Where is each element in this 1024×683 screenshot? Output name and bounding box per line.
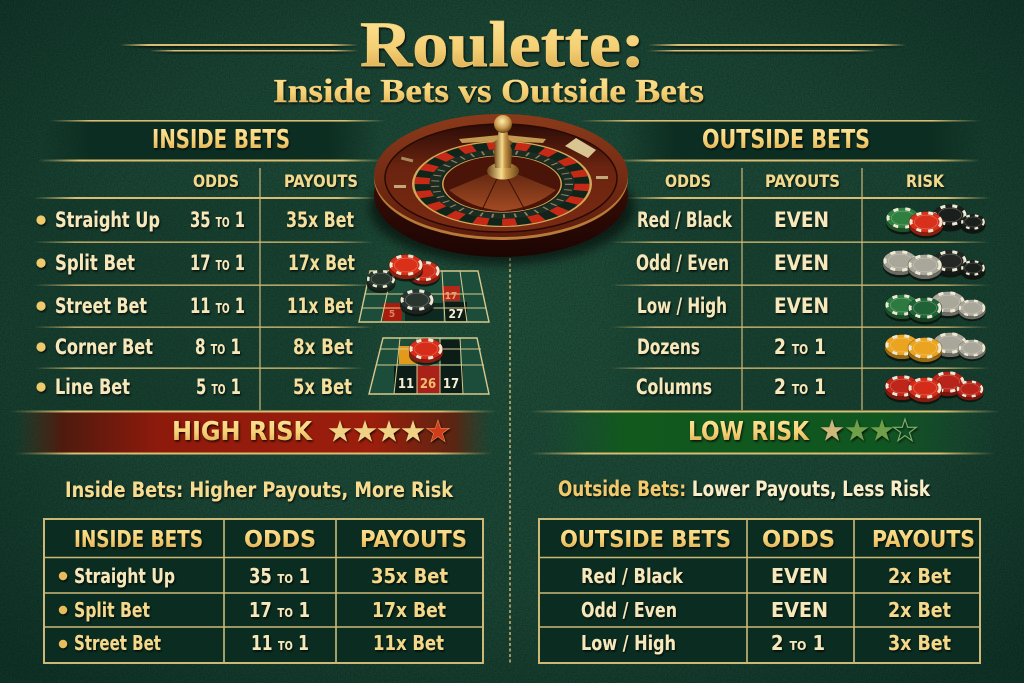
rows: inside bets: 8x Bet	[293, 335, 353, 360]
body rows: 2x Bet	[888, 564, 951, 588]
rows: outside bets: Odd / Even	[636, 251, 729, 276]
heading: outside bets: RISK	[906, 172, 945, 192]
body rows: Low / High	[581, 631, 676, 655]
label: low risk: LOW RISK	[688, 417, 810, 447]
number ring	[412, 141, 592, 227]
body rows: 17x Bet	[372, 598, 446, 622]
body rows: 3x Bet	[888, 631, 951, 655]
label: high risk: HIGH RISK	[172, 417, 313, 447]
rows: outside bets: EVEN	[774, 208, 829, 233]
mini table: corner and line bets	[369, 338, 489, 394]
heading: outside bets	[665, 125, 945, 192]
heading: inside bets: ODDS	[193, 172, 239, 192]
mini table: split and street bets: 5	[389, 309, 395, 320]
title: Roulette:	[360, 9, 645, 81]
high risk banner	[10, 410, 498, 454]
panel: inside bets table	[10, 120, 395, 410]
rows: outside bets	[636, 208, 829, 400]
mini table: split and street bets	[359, 254, 489, 322]
rows: outside bets: Red / Black	[637, 208, 733, 233]
header row: PAYOUTS	[872, 525, 975, 553]
rows: outside bets: Columns	[636, 375, 712, 400]
center divider	[509, 258, 511, 664]
header row: ODDS	[762, 525, 835, 553]
header row: OUTSIDE BETS	[560, 525, 731, 553]
heading: outside bets: ODDS	[665, 172, 711, 192]
body rows: 35x Bet	[371, 564, 448, 588]
mini table: corner and line bets: 11	[398, 377, 414, 392]
heading: inside bets: PAYOUTS	[284, 172, 358, 192]
rows: inside bets: 8 TO 1	[195, 335, 241, 360]
rows: inside bets: 35 TO 1	[190, 208, 245, 233]
stars: low risk	[821, 419, 916, 441]
chips: risk column	[883, 204, 986, 404]
rows: inside bets: Corner Bet	[55, 335, 153, 360]
rows: inside bets: 5 TO 1	[196, 375, 241, 400]
mini table: corner and line bets: 17	[443, 377, 459, 392]
body rows	[59, 564, 448, 655]
rows: inside bets: Straight Up	[55, 208, 160, 233]
rows: inside bets: 5x Bet	[293, 375, 352, 400]
header row	[74, 525, 467, 553]
body rows: Street Bet	[74, 631, 161, 655]
rows: outside bets: EVEN	[774, 251, 829, 276]
body rows: 35 TO 1	[249, 564, 310, 588]
heading: outside bets: PAYOUTS	[765, 172, 840, 192]
body rows	[581, 564, 951, 655]
body rows: 11x Bet	[373, 631, 444, 655]
rows: inside bets: Line Bet	[55, 375, 130, 400]
body rows: Split Bet	[74, 598, 150, 622]
rows: inside bets: Street Bet	[55, 294, 147, 319]
body rows: EVEN	[771, 598, 828, 622]
body rows: Straight Up	[74, 564, 175, 588]
heading: outside bets: OUTSIDE BETS	[702, 125, 870, 155]
comparison table: inside bets	[44, 519, 483, 663]
roulette wheel	[370, 114, 634, 264]
rows: outside bets: EVEN	[774, 294, 829, 319]
heading: inside bets: INSIDE BETS	[152, 125, 290, 155]
title	[120, 9, 906, 110]
rows: outside bets: 2 TO 1	[774, 375, 826, 400]
mini table: split and street bets: 17	[445, 291, 457, 302]
body rows: 11 TO 1	[251, 631, 309, 655]
mini table: corner and line bets: 26	[420, 377, 436, 392]
rows: outside bets: Dozens	[637, 335, 700, 360]
panel: outside bets table	[580, 120, 1000, 410]
body rows: 17 TO 1	[249, 598, 310, 622]
low risk banner	[530, 410, 1000, 454]
heading: inside bets	[152, 125, 358, 192]
rows: inside bets: 35x Bet	[286, 208, 354, 233]
rows: outside bets: Low / High	[637, 294, 727, 319]
header row: INSIDE BETS	[74, 525, 203, 553]
rows: inside bets: Split Bet	[55, 251, 135, 276]
rows: inside bets: 17 TO 1	[190, 251, 245, 276]
spindle	[459, 115, 546, 180]
rows: inside bets: 11 TO 1	[190, 294, 245, 319]
body rows: Odd / Even	[581, 598, 677, 622]
comparison table: outside bets	[539, 519, 980, 663]
central cone	[449, 168, 556, 211]
rows: inside bets: 11x Bet	[287, 294, 353, 319]
wheel bowl details	[394, 138, 608, 188]
header row: PAYOUTS	[360, 525, 467, 553]
rows: inside bets: 17x Bet	[288, 251, 355, 276]
rows: inside bets	[36, 208, 355, 400]
caption: outside bets: Outside Bets: Lower Payouts, Less Risk	[558, 477, 931, 502]
header row: ODDS	[244, 525, 316, 553]
body rows: Red / Black	[581, 564, 684, 588]
header row	[560, 525, 975, 553]
body rows: 2 TO 1	[771, 631, 825, 655]
body rows: 2x Bet	[888, 598, 951, 622]
mini table: split and street bets: 27	[448, 307, 464, 321]
stars: high risk	[329, 420, 449, 442]
body rows: EVEN	[771, 564, 828, 588]
title: Inside Bets vs Outside Bets	[273, 73, 704, 110]
caption: inside bets: Inside Bets: Higher Payouts, More Risk	[65, 478, 454, 503]
rows: outside bets: 2 TO 1	[774, 335, 826, 360]
